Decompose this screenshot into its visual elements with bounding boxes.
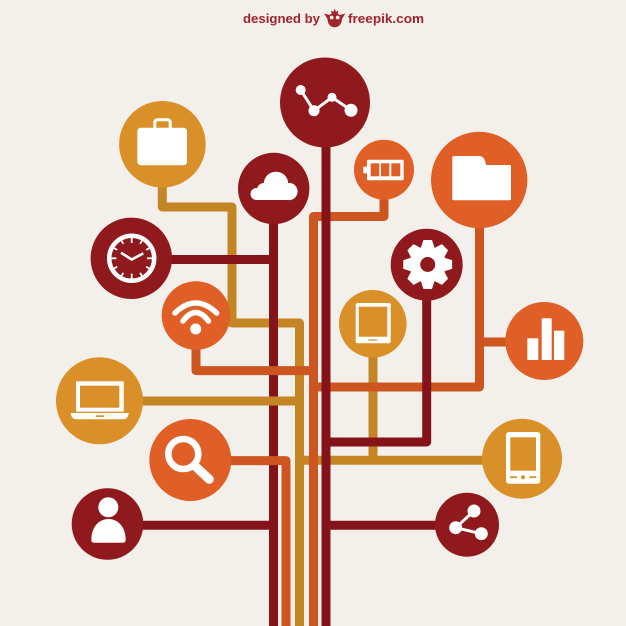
line: search orange — [190, 461, 286, 626]
node: share — [435, 493, 499, 557]
line: bars orange — [480, 338, 544, 346]
line: main trunk maroon — [322, 103, 330, 626]
node: person — [72, 488, 143, 560]
node: laptop — [56, 357, 143, 444]
attribution: designed by freepik.com — [243, 8, 424, 27]
node: clock — [91, 218, 172, 299]
line: share maroon — [326, 521, 467, 530]
line: clock maroon — [131, 255, 273, 264]
attribution: designed by freepik.com: freepik.com — [348, 11, 424, 26]
line: wifi orange — [196, 315, 309, 371]
node: smartphone — [482, 419, 562, 499]
line: phone gold — [304, 456, 522, 465]
node: line chart — [280, 58, 370, 148]
node: battery — [354, 140, 414, 200]
line: gear maroon — [326, 265, 427, 442]
node: tablet — [339, 290, 407, 358]
node: folder — [431, 132, 527, 228]
node: bar chart — [505, 302, 583, 380]
node: magnifier — [149, 419, 231, 501]
node: wifi — [162, 281, 230, 350]
connector lines — [100, 103, 544, 626]
line: laptop gold — [100, 396, 295, 406]
node: cloud — [238, 153, 309, 224]
line: folder orange — [318, 180, 480, 387]
line: person maroon — [107, 521, 273, 530]
line: tablet gold — [368, 324, 378, 460]
line: cloud maroon — [269, 188, 278, 626]
node: gear — [391, 229, 463, 301]
line: briefcase gold — [162, 144, 300, 626]
node: briefcase — [119, 101, 206, 188]
attribution: designed by freepik.com: designed by — [243, 11, 321, 26]
line: battery orange — [314, 170, 384, 626]
